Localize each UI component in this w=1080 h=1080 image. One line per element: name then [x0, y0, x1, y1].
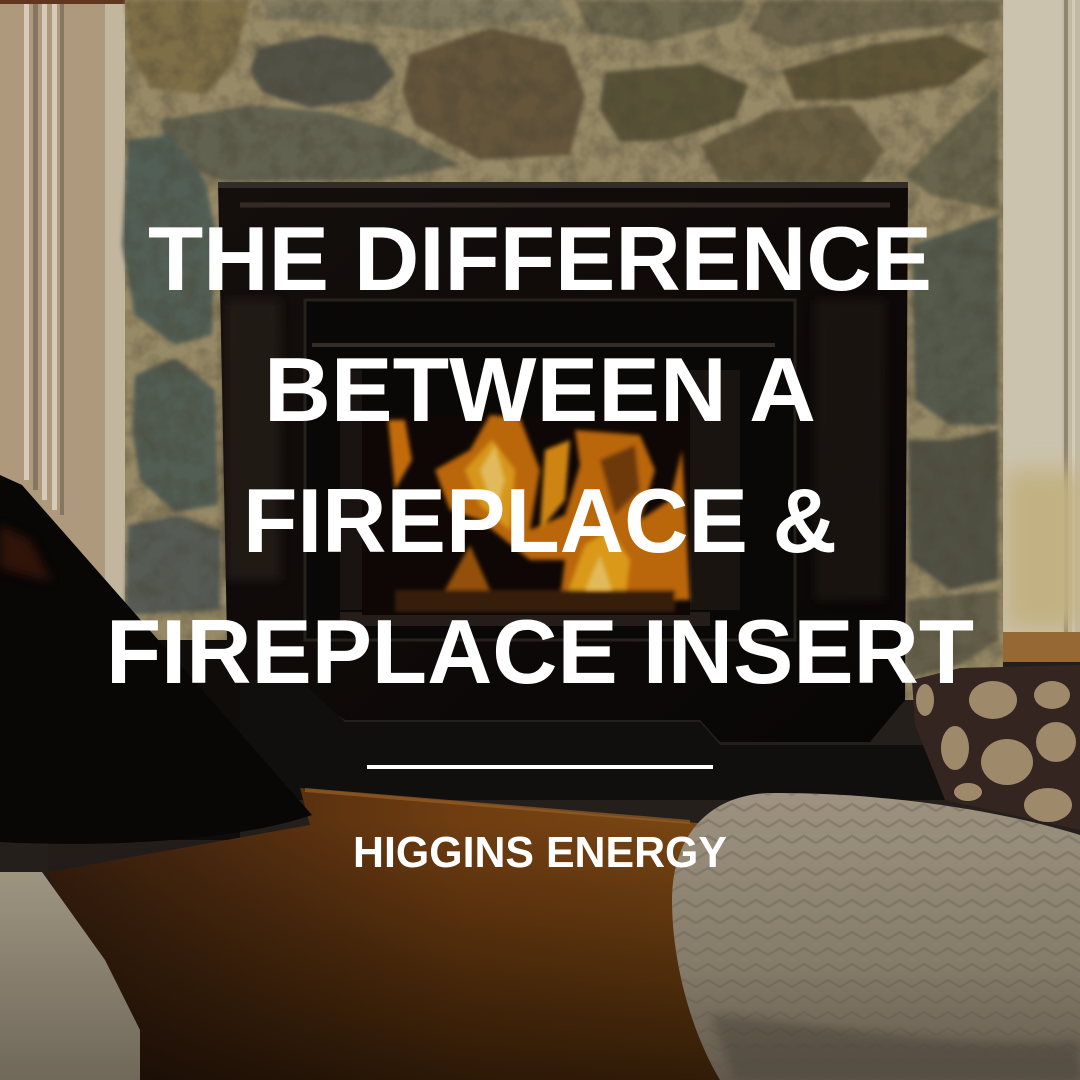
title: THE DIFFERENCE — [148, 209, 932, 310]
sofa arm — [672, 793, 1080, 1080]
lamp shade glow — [0, 525, 52, 582]
left wall — [0, 0, 135, 640]
brand name: HIGGINS ENERGY — [353, 828, 727, 877]
fireplace surround — [218, 182, 908, 742]
fire window — [362, 415, 690, 615]
lamp shade — [0, 475, 312, 844]
hearth and floor — [0, 640, 945, 840]
title: BETWEEN A — [264, 340, 816, 441]
wooden table — [48, 788, 740, 1080]
title: FIREPLACE & — [243, 471, 837, 572]
right wall — [970, 0, 1080, 662]
title — [106, 209, 974, 703]
title: FIREPLACE INSERT — [106, 602, 974, 703]
lamp base — [0, 872, 140, 1080]
divider line — [367, 765, 713, 769]
stone wall — [122, 0, 1003, 700]
cushion — [912, 665, 1080, 830]
